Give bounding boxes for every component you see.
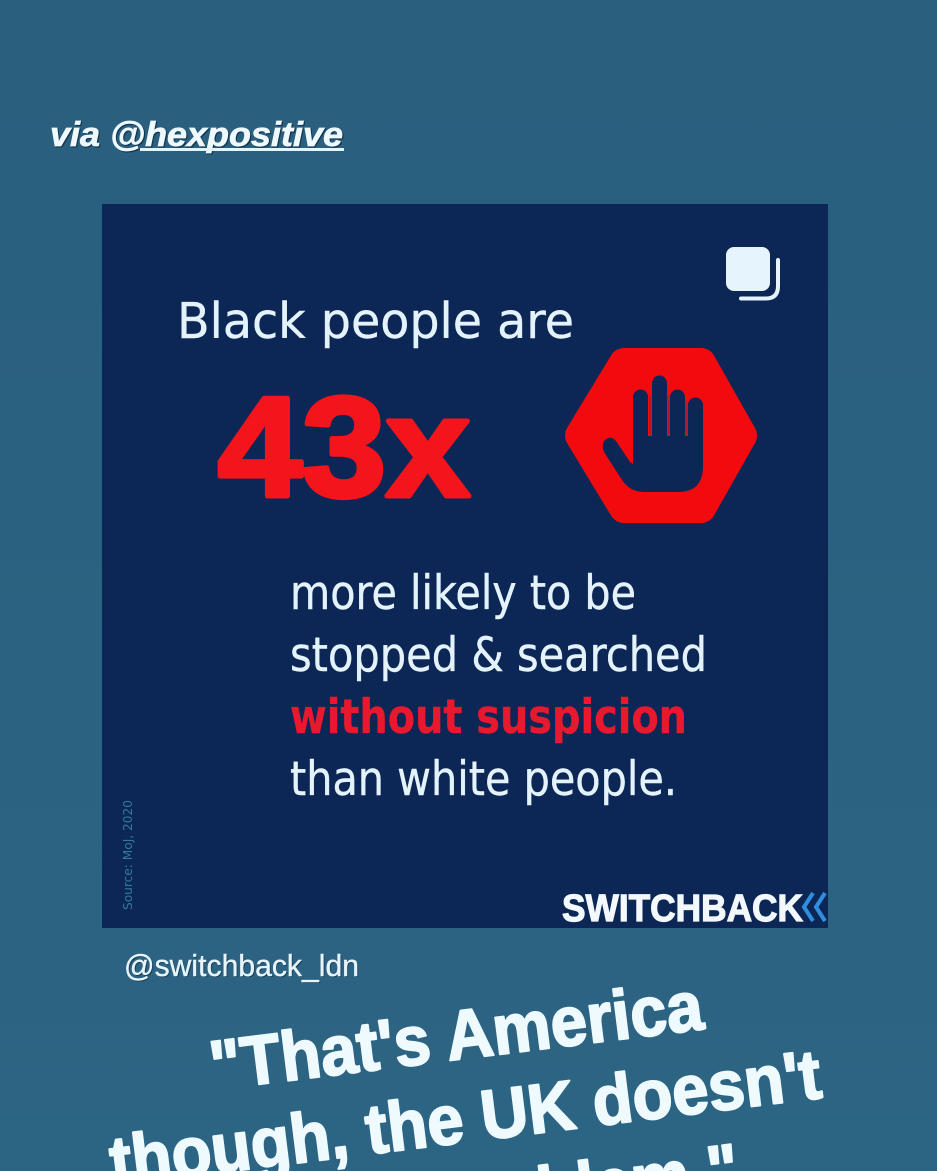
- text: switchback handle: @switchback_ldn: [125, 949, 360, 984]
- logo: SWITCHBACK: SWITCHBACK: [562, 888, 804, 930]
- text: rotated quote caption: "That's America: [205, 966, 708, 1105]
- text: more likely to be stopped and searched without suspicion than white people: than white people.: [290, 752, 677, 807]
- infographic canvas: [52, 120, 828, 1171]
- text: switchback handle: @switchback_ldn: [124, 948, 359, 983]
- via credit heading: via @hexpositive: [51, 117, 344, 155]
- text: Black people are: Black people are: [177, 293, 574, 350]
- text: source note: Source: MoJ, 2020: [120, 800, 135, 910]
- text: 43x statistic: 43x: [218, 368, 470, 527]
- text: more likely to be stopped and searched without suspicion than white people: without suspicion: [290, 690, 687, 745]
- icon: multiple-posts squares: [726, 247, 778, 298]
- panel: stop and search statistic: [102, 204, 828, 930]
- text: more likely to be stopped and searched without suspicion than white people: stopped & searched: [290, 628, 707, 683]
- icon: hand: [603, 376, 703, 492]
- text: more likely to be stopped and searched without suspicion than white people: more likely to be: [290, 566, 636, 621]
- via credit heading: via @hexpositive: [50, 116, 343, 154]
- text: more likely to be stopped and searched without suspicion than white people: [290, 566, 707, 807]
- icon: red stop hexagon with hand: [580, 363, 742, 508]
